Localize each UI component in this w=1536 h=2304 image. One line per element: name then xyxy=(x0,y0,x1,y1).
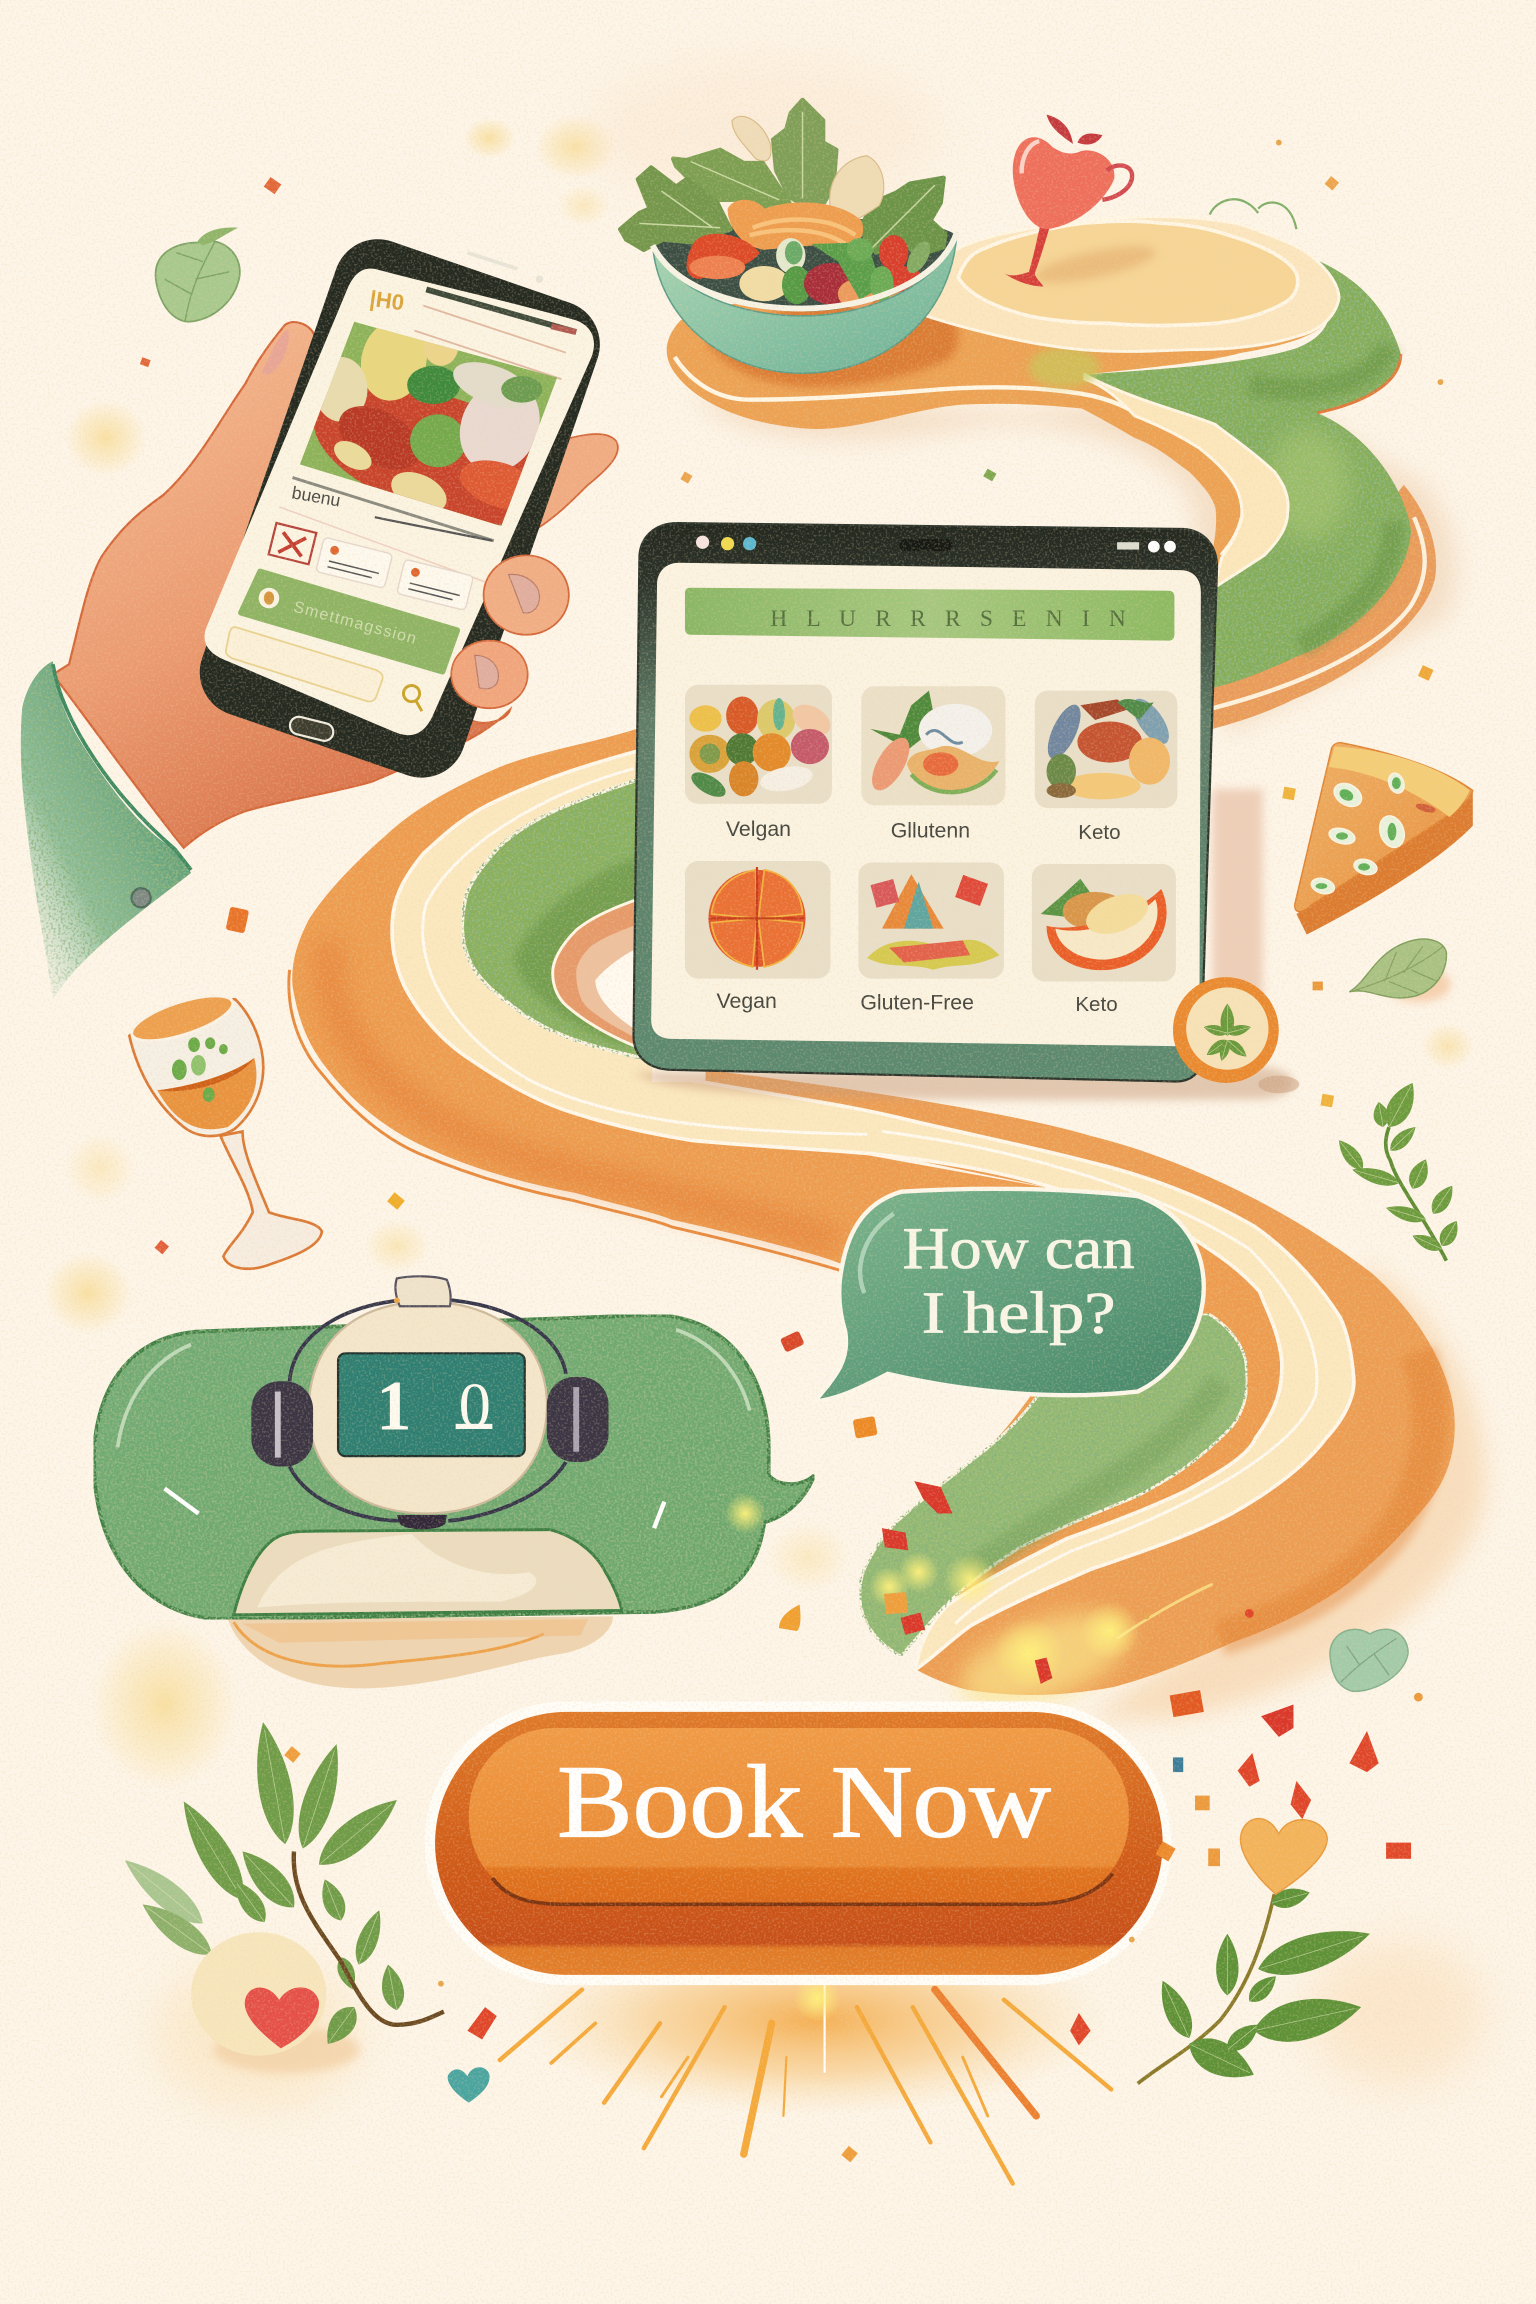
wine surface xyxy=(127,987,238,1050)
slice top xyxy=(1295,743,1473,912)
bowl rim and body xyxy=(653,232,957,373)
tile: pizza xyxy=(685,861,830,979)
tablet frame xyxy=(634,523,1217,1081)
robot display: 0 xyxy=(459,1369,491,1441)
white outline xyxy=(425,1702,1171,1985)
green sparkle xyxy=(725,1493,766,1534)
pizza slice xyxy=(1295,743,1473,935)
tablet shadows xyxy=(635,789,1293,1100)
cup handle xyxy=(1102,165,1132,200)
robot shadow base xyxy=(228,1616,613,1688)
robot head xyxy=(309,1302,547,1513)
robot headset band xyxy=(290,1299,566,1521)
right side halo xyxy=(1088,1264,1485,1719)
upper finger xyxy=(484,555,569,635)
tablet device: Keto xyxy=(1078,821,1121,844)
sand oval xyxy=(958,221,1298,325)
sand shadow xyxy=(1032,239,1158,290)
tile: keto plate xyxy=(1035,691,1177,808)
lower base xyxy=(435,1712,1163,1975)
crust side xyxy=(1296,791,1473,935)
orange platform band xyxy=(667,216,1339,582)
yellow green blend xyxy=(1029,347,1099,388)
mixed vegetables xyxy=(739,266,789,301)
green ribbon section xyxy=(1085,260,1411,688)
left loop orange band xyxy=(292,723,1282,1656)
tablet top bar buttons xyxy=(696,536,709,549)
lobed salad leaves xyxy=(620,100,945,256)
lower finger xyxy=(451,641,528,708)
button glow xyxy=(522,1925,1110,2116)
salad bowl xyxy=(620,100,957,373)
smartphone xyxy=(188,227,612,790)
tablet labels: Velgan xyxy=(726,817,791,841)
left ear cup xyxy=(251,1381,313,1466)
microphone xyxy=(397,1515,447,1529)
hand holding phone xyxy=(21,322,618,999)
tile: gluten free xyxy=(858,863,1004,979)
slice crust xyxy=(1329,746,1470,817)
green ribbon shading xyxy=(1249,345,1394,647)
basil leaf xyxy=(1349,939,1451,1002)
pale garnish xyxy=(732,116,771,161)
phone menu cards xyxy=(316,537,393,588)
upper winding ribbon xyxy=(667,216,1457,735)
glass bowl xyxy=(129,999,263,1136)
phone speaker and status xyxy=(467,253,517,269)
front fingers xyxy=(451,555,569,708)
tile: mixed vegan xyxy=(685,685,836,804)
phone green button: Smettmagssion xyxy=(291,598,418,648)
left band shading xyxy=(328,940,838,1242)
outer orange band xyxy=(706,1070,1455,1695)
teal heart xyxy=(448,2067,490,2103)
phone home button xyxy=(288,715,335,743)
sparkles on ribbon xyxy=(944,1553,997,1606)
tile: keto omelette xyxy=(1032,864,1176,982)
tablet device: Gluten-Free xyxy=(860,990,974,1014)
tablet device: Keto xyxy=(1075,993,1118,1016)
confetti pieces xyxy=(140,140,1443,2162)
ribbon soft shadow xyxy=(691,382,1457,735)
tile: gluten dish xyxy=(861,686,1005,805)
fingers behind phone xyxy=(536,434,618,529)
left loop green section xyxy=(462,774,654,1061)
sunburst rays xyxy=(500,1975,1111,2184)
tomato xyxy=(687,234,760,279)
phone hero food photo xyxy=(300,322,557,526)
heart apple body xyxy=(1013,137,1114,229)
glass foot and stem xyxy=(220,1131,322,1269)
robot top cap xyxy=(395,1276,451,1306)
cream platform xyxy=(926,217,1339,351)
upper key xyxy=(469,1728,1129,1904)
leaves xyxy=(117,1719,407,2051)
palm xyxy=(53,322,510,848)
herbs in glass xyxy=(172,1037,228,1102)
lower winding ribbon xyxy=(289,723,1485,1726)
inner white center xyxy=(595,940,654,1040)
robot display xyxy=(338,1353,525,1456)
help speech bubble xyxy=(814,1189,1204,1402)
shirt sleeve xyxy=(21,661,191,999)
green shading xyxy=(514,852,654,1046)
tablet header bar: H L U R R R S E N I N xyxy=(770,606,1126,632)
phone body xyxy=(188,227,612,790)
cuff button xyxy=(132,888,151,907)
stem xyxy=(1138,1894,1274,2084)
red heart xyxy=(245,1987,319,2048)
egg fruit xyxy=(191,1932,326,2056)
pizza toppings xyxy=(1310,771,1409,896)
phone input box xyxy=(226,627,383,701)
phone logo text: |H0 xyxy=(368,286,406,315)
phone diet icon xyxy=(269,523,316,564)
white contour line xyxy=(675,357,1243,555)
leaf bottom right xyxy=(1330,1629,1408,1691)
bubble highlights xyxy=(118,1330,750,1447)
bowl interior xyxy=(653,219,957,312)
phone menu label: buenu xyxy=(290,482,342,511)
bubble highlight xyxy=(860,1214,894,1293)
orange heart xyxy=(1240,1819,1327,1894)
stem xyxy=(294,1851,444,2025)
wine glass xyxy=(127,987,322,1269)
book now button xyxy=(425,1702,1171,1985)
robot body xyxy=(234,1530,622,1615)
help speech bubble: I help? xyxy=(922,1281,1116,1346)
lower outer orange stripe xyxy=(1213,485,1436,729)
herb sprig right xyxy=(1333,1078,1463,1261)
cream streak lines xyxy=(423,768,1317,1624)
apple glass xyxy=(1004,115,1132,287)
phone screen xyxy=(205,269,594,735)
search icon xyxy=(403,685,422,711)
tablet header bar xyxy=(685,588,1174,641)
mushroom xyxy=(830,156,884,222)
lower green section xyxy=(860,1314,1247,1656)
button label: Book Now xyxy=(557,1744,1051,1860)
right herb with heart xyxy=(1138,1819,1375,2090)
bubble text: How can xyxy=(902,1216,1135,1281)
tablet device xyxy=(634,523,1217,1081)
small arcs xyxy=(1210,199,1296,229)
tablet device: Gllutenn xyxy=(891,819,970,843)
robot display: 1 xyxy=(376,1368,412,1446)
round herb badge xyxy=(1173,977,1299,1093)
robot chat bubble xyxy=(94,1276,814,1619)
cream band xyxy=(392,746,1354,1669)
glass stem and base xyxy=(1004,223,1049,287)
outer band shading xyxy=(1220,1352,1430,1638)
phone green button xyxy=(241,572,457,672)
thumbnail xyxy=(262,329,289,375)
thin outer contour xyxy=(289,970,842,1271)
bowl shadow on platform xyxy=(706,294,958,387)
leaf apple top left xyxy=(156,228,240,322)
tablet screen xyxy=(651,563,1201,1046)
cream band xyxy=(1085,375,1288,588)
apple leaves xyxy=(1047,115,1102,145)
leaf veins xyxy=(639,112,935,250)
liquid xyxy=(157,1058,256,1129)
left herb bouquet xyxy=(117,1719,444,2073)
feathered leaves xyxy=(1152,1884,1375,2090)
soft shadow xyxy=(213,2026,360,2073)
tablet device: Vegan xyxy=(716,989,777,1013)
right ear cup xyxy=(547,1377,609,1462)
inner orange ring xyxy=(553,893,654,1054)
pasta pile xyxy=(728,200,863,250)
